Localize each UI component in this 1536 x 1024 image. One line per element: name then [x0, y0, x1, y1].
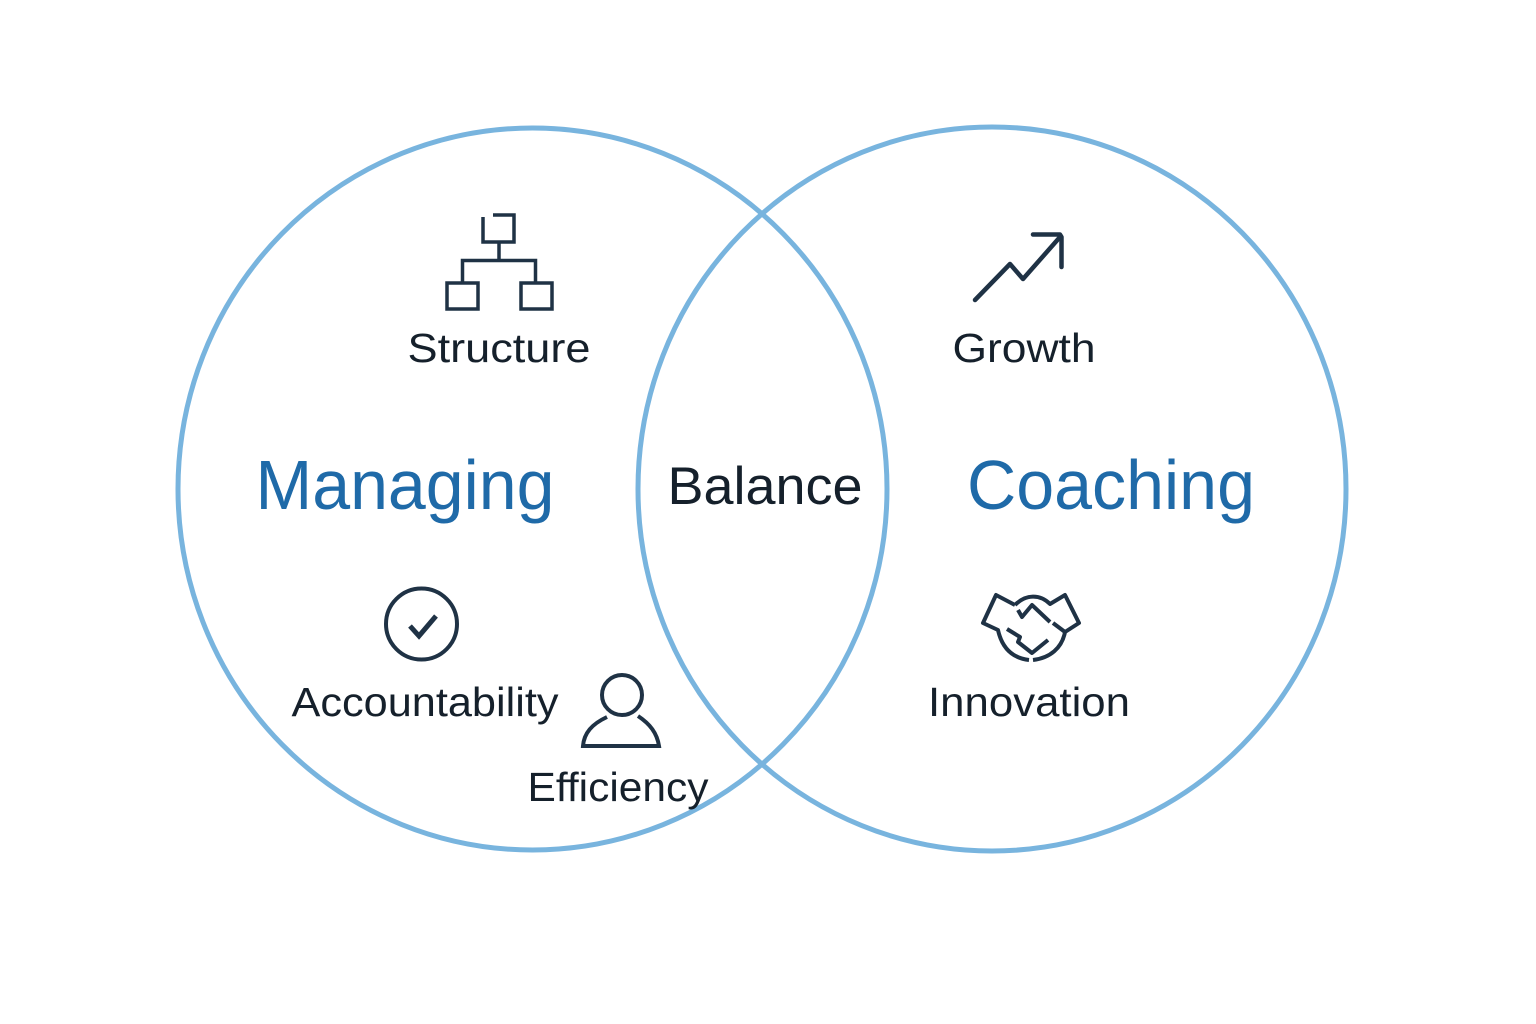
icon: check circle	[386, 588, 457, 660]
label: innovation: Innovation	[928, 679, 1130, 725]
label: balance: Balance	[668, 457, 862, 516]
label: growth: Growth	[952, 325, 1096, 371]
icon: handshake	[983, 595, 1079, 660]
circle: coaching	[638, 127, 1346, 851]
heading: coaching: Coaching	[967, 446, 1255, 524]
icon: person	[583, 675, 659, 746]
label: structure: Structure	[408, 325, 590, 371]
circle: managing	[178, 128, 887, 850]
label: accountability: Accountability	[292, 679, 559, 725]
label: efficiency: Efficiency	[528, 764, 709, 810]
heading: managing: Managing	[256, 446, 554, 524]
icon: org chart	[447, 215, 552, 309]
icon: growth arrow	[975, 234, 1062, 300]
